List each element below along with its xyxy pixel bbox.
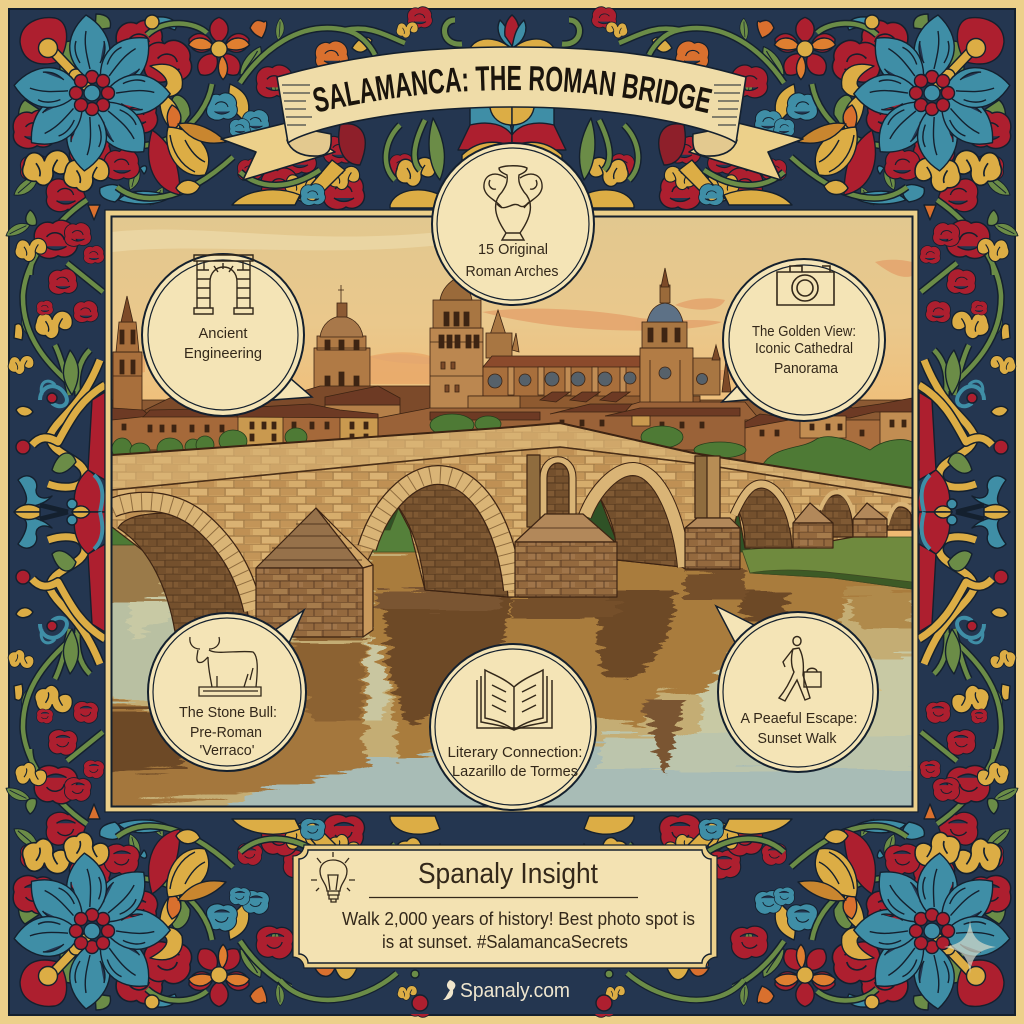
icon: amphora (484, 166, 542, 240)
icon: light bulb (311, 852, 355, 902)
ribbon curl right (693, 128, 737, 156)
pier 1 (256, 508, 373, 637)
arch rings (112, 461, 911, 610)
footer strip (280, 966, 744, 1014)
left tower (113, 296, 142, 416)
callout: 15 Original Roman Arches: 15 Original (478, 242, 548, 258)
river (100, 540, 920, 820)
callout: A Peaceful Escape (716, 606, 878, 772)
icon: open book (477, 670, 552, 730)
central scene frame (100, 210, 920, 820)
roman bridge (112, 423, 912, 637)
sunset clouds (112, 229, 912, 384)
callout: The Stone Bull: Pre-Roman (190, 725, 262, 741)
callout: The Stone Bull: The Stone Bull: (179, 705, 277, 721)
footer: brand: Spanaly.com (460, 980, 570, 1002)
parapet band (112, 423, 912, 498)
callout: The Golden View: The Golden View: (752, 324, 856, 340)
pier 5 (853, 503, 887, 537)
callout: A Peaceful Escape: Sunset Walk (758, 731, 837, 747)
title: SALAMANCA: THE ROMAN BRIDGE (313, 66, 712, 114)
callout: Literary Connection: Literary Connection: (448, 745, 582, 761)
far banks (112, 495, 912, 589)
callout: The Golden View (722, 259, 885, 421)
arch vaults (118, 475, 911, 632)
callout: The Golden View: Iconic Cathedral (755, 341, 853, 357)
town houses centre (378, 402, 760, 450)
ornament quadrant: bottom right (470, 512, 1018, 1017)
callout: Literary Connection: Lazarillo de Tormes (452, 764, 578, 780)
cathedral nave (468, 356, 700, 408)
dome church (314, 285, 370, 390)
right ribbon tail (689, 122, 803, 180)
callout: 15 Original Roman Arches (432, 143, 594, 305)
town houses right (745, 398, 912, 470)
bridge body (112, 423, 912, 625)
callout: 15 Original Roman Arches: Roman Arches (466, 264, 558, 280)
banner: title ribbon (220, 46, 804, 181)
window arch (527, 455, 569, 527)
insight panel (293, 845, 717, 968)
pier 2 (515, 514, 617, 597)
ornament quadrant: top right (470, 7, 1018, 512)
callout: The Stone Bull (148, 610, 306, 771)
pier 4 (793, 503, 833, 548)
insight text: is at sunset. #SalamancaSecrets (382, 931, 628, 952)
ornament quadrant: bottom left (6, 512, 554, 1017)
left ribbon tail (221, 122, 335, 180)
insight heading: Spanaly Insight (418, 858, 598, 890)
ribbon curl left (287, 128, 331, 156)
town houses left (112, 404, 378, 450)
icon: roman arch (194, 255, 253, 314)
insight text: Walk 2,000 years of history! Best photo spot is (342, 908, 695, 929)
callout: The Stone Bull: 'Verraco' (200, 743, 255, 759)
domed tower (640, 268, 731, 410)
icon: spanaly mark (443, 980, 455, 1000)
callout: The Golden View: Panorama (774, 361, 839, 377)
insight text (342, 908, 695, 952)
main ribbon (277, 47, 746, 143)
brown reflections (100, 640, 370, 806)
icon: sparkle watermark (944, 920, 996, 974)
roofs by the dome church (144, 386, 430, 413)
icon: stone bull (190, 637, 261, 696)
icon: walking man (779, 636, 821, 701)
icon: camera (777, 266, 834, 305)
trees (112, 414, 912, 492)
callout: Ancient Engineering: Ancient (198, 326, 248, 342)
small spire (486, 310, 519, 358)
ornament quadrant: top left (6, 7, 554, 512)
city skyline (112, 268, 912, 470)
tall cathedral tower (430, 278, 483, 412)
callout: A Peaceful Escape: A Peaeful Escape: (740, 711, 858, 727)
town backing (112, 400, 902, 460)
pier 3 with tower (685, 456, 740, 569)
callout: Ancient Engineering (142, 254, 312, 416)
pale water zones (112, 602, 174, 704)
callout: Ancient Engineering: Engineering (184, 346, 262, 362)
callout: Literary Connection (430, 644, 596, 810)
